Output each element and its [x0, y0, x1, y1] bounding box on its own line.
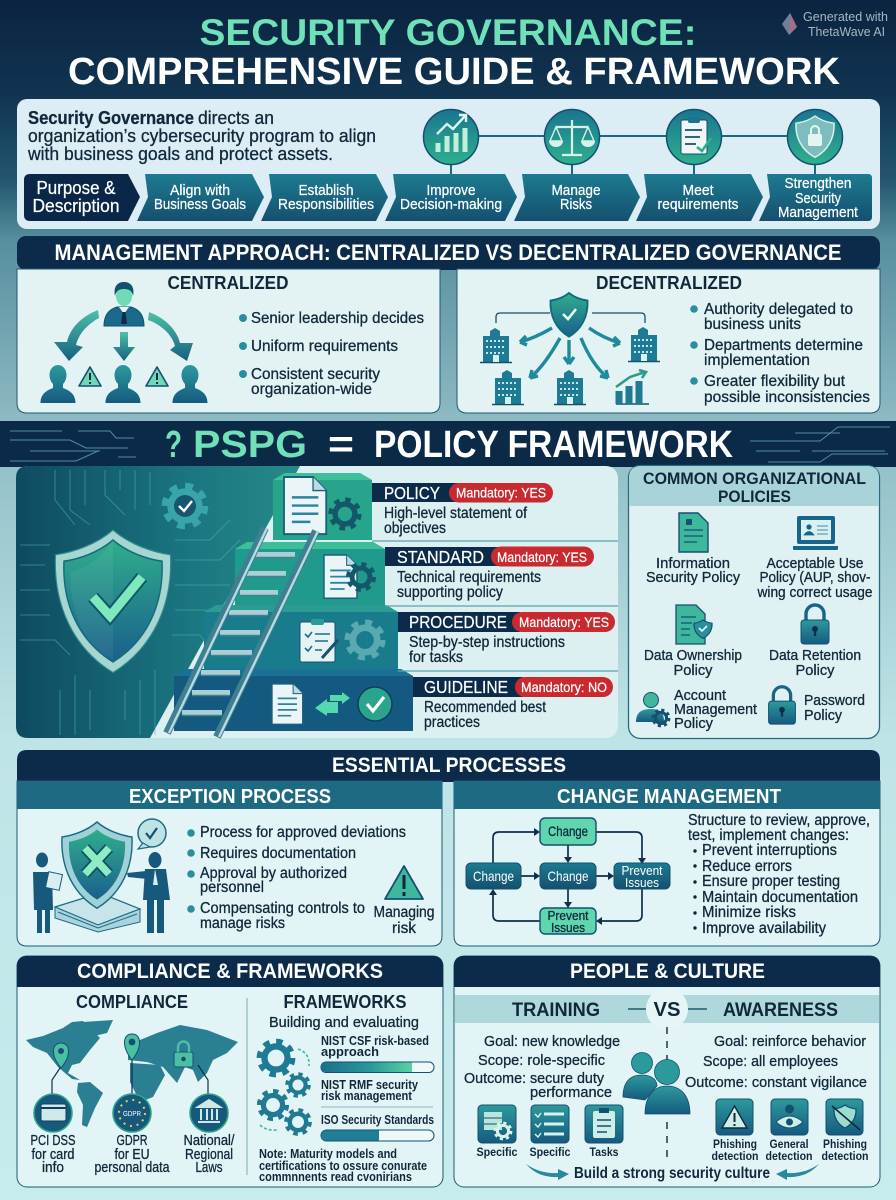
panel: centralized [17, 269, 440, 413]
chevron: meet requirements: requirements [658, 196, 738, 213]
node: left change [466, 863, 521, 889]
world map [26, 1020, 238, 1127]
icon: phishing warning: detection [712, 1149, 758, 1163]
item: information security policy: Security Policy [646, 570, 741, 586]
bullet list: Greater flexibility but [704, 373, 846, 390]
icon: central shield [496, 293, 645, 337]
chevron: strengthen security management: Strengthen [784, 175, 852, 192]
awareness icons [712, 1099, 868, 1163]
item: gdpr [94, 1094, 170, 1176]
label: procedure: PROCEDURE [409, 612, 507, 632]
banner: pspg policy framework: ? [165, 424, 182, 466]
heading [17, 236, 880, 270]
banner: pspg policy framework [0, 421, 896, 467]
bullet list: Departments determine [704, 337, 863, 354]
label: standard: Technical requirements [397, 569, 541, 586]
label: guideline: Recommended best [424, 699, 547, 716]
change text: Prevent interruptions [702, 842, 837, 859]
item: acceptable use policy: Acceptable Use [766, 556, 864, 572]
chevron: strengthen security management: Security [795, 190, 841, 207]
icon: phishing warning [712, 1099, 758, 1163]
item: gdpr: for EU [114, 1147, 150, 1163]
icon: phishing shield [822, 1099, 868, 1163]
panel: change management [454, 781, 880, 946]
item: nist rmf [321, 1078, 433, 1107]
panel: decentralized: DECENTRALIZED [596, 272, 742, 293]
item: information security policy: Information [656, 556, 730, 572]
icon: growth chart [424, 110, 478, 164]
awareness text: Outcome: constant vigilance [685, 1074, 867, 1091]
node: center change [540, 863, 596, 889]
chevron: manage risks: Manage [552, 182, 600, 199]
panel: exception process: EXCEPTION PROCESS [129, 786, 331, 808]
item: data ownership policy: Data Ownership [644, 648, 742, 664]
item: acceptable use policy: wing correct usage [757, 585, 872, 601]
versus band: TRAINING [512, 1000, 600, 1021]
icon: man [127, 852, 170, 933]
heading [17, 750, 880, 782]
panel: purpose and description [17, 99, 880, 229]
intro text: Security Governance [28, 107, 194, 128]
watermark: ThetaWave AI [808, 25, 885, 39]
connector lines [52, 1058, 208, 1095]
chevron: establish responsibilities: Establish [298, 182, 354, 199]
label: standard: Mandatory: YES [497, 549, 587, 565]
chevron: strengthen security management [759, 174, 872, 221]
panel: people and culture [454, 956, 880, 1187]
change text: test, implement changes: [688, 827, 849, 844]
icon: leader [104, 282, 144, 326]
section: essential processes [17, 750, 880, 946]
icon: specific list: Specific [530, 1145, 571, 1159]
chevron: improve decision-making: Improve [426, 182, 476, 199]
label: policy: objectives [384, 520, 446, 537]
node: top change: Change [548, 823, 588, 839]
title: COMPREHENSIVE GUIDE & FRAMEWORK [68, 51, 841, 93]
compliance column [26, 992, 238, 1176]
bullet list: Uniform requirements [251, 338, 398, 355]
tier: policy [273, 473, 372, 540]
bullet list: Approval by authorized [200, 865, 347, 882]
label: guideline [413, 677, 613, 731]
item: pci dss: info [42, 1160, 64, 1176]
arrows: delegation [520, 328, 620, 378]
item: password policy [769, 687, 865, 724]
change text: Ensure proper testing [702, 873, 840, 890]
change text: Improve availability [702, 920, 826, 937]
frameworks column: FRAMEWORKS [284, 992, 406, 1012]
bullet list [690, 301, 870, 406]
node: top change [540, 818, 596, 845]
item: acceptable use policy: Policy (AUP, shov- [760, 570, 871, 586]
panel: people and culture: PEOPLE & CULTURE [570, 960, 765, 983]
icon: phishing shield: detection [822, 1149, 868, 1163]
label: procedure: for tasks [409, 649, 463, 666]
panel: centralized: CENTRALIZED [168, 272, 288, 293]
icon: general eye: General [770, 1137, 808, 1151]
label: policy [372, 483, 553, 537]
ladder [167, 528, 318, 737]
icon: gear check [165, 486, 205, 526]
icon: tasks [585, 1105, 623, 1159]
versus band: AWARENESS [723, 1000, 838, 1021]
title [68, 12, 841, 93]
label: guideline: Mandatory: NO [521, 679, 607, 695]
dark circuit background [16, 466, 300, 738]
note: certifications to ossure conurate [259, 1159, 427, 1173]
icon: general eye: detection [766, 1149, 812, 1163]
label: standard [385, 546, 594, 601]
bullet list: Requires documentation [200, 845, 356, 862]
item: national regional laws: Regional [185, 1147, 233, 1163]
chevron: align with business goals: Align with [170, 182, 230, 199]
note: commnnents read cvonirians [259, 1170, 412, 1184]
chevron: meet requirements [636, 174, 763, 221]
compliance column: COMPLIANCE [76, 992, 188, 1012]
pyramid tiers [174, 473, 413, 731]
icon: scales [544, 110, 600, 164]
heading: COMMON ORGANIZATIONAL [643, 469, 866, 488]
banner: pspg policy framework: POLICY FRAMEWORK [374, 424, 733, 466]
versus band: VS [654, 999, 680, 1021]
chevron: meet requirements: Meet [682, 182, 714, 199]
label: policy: POLICY [384, 483, 440, 503]
chevron: establish responsibilities: Responsibilities [278, 196, 374, 213]
icon: managing risk: risk [392, 920, 416, 937]
change text: Reduce errors [702, 858, 792, 875]
icon: general eye [766, 1099, 812, 1163]
item: gdpr: GDPR [123, 1109, 141, 1118]
label: standard: STANDARD [397, 547, 484, 567]
bullet list [239, 310, 424, 398]
item: national regional laws [184, 1094, 235, 1176]
icon: business units [480, 327, 660, 404]
flow diagram [466, 818, 670, 935]
item: gdpr: GDPR [116, 1133, 148, 1149]
icon: rising chart [616, 370, 649, 404]
item: nist rmf: NIST RMF security [321, 1078, 418, 1092]
panel: exception process [17, 781, 442, 946]
item: national regional laws: Laws [196, 1160, 222, 1176]
item: nist csf: approach [321, 1045, 379, 1059]
training text: Goal: new knowledge [484, 1033, 620, 1050]
heading: MANAGEMENT APPROACH: CENTRALIZED VS DECENTRALIZED GOVERNANCE [54, 240, 842, 265]
chevron: align with business goals [137, 174, 264, 221]
watermark: Generated with [803, 10, 888, 24]
icon: phishing shield: Phishing [823, 1137, 867, 1151]
icon: phishing warning: Phishing [713, 1137, 757, 1151]
panel: policy framework pyramid [16, 466, 618, 738]
frameworks column: Building and evaluating [269, 1014, 419, 1031]
tier: standard [235, 542, 385, 605]
awareness text [685, 1033, 867, 1091]
item: password policy: Password [804, 693, 865, 709]
awareness text: Scope: all employees [703, 1053, 838, 1070]
item: password policy: Policy [804, 708, 843, 724]
heading: ESSENTIAL PROCESSES [332, 754, 566, 777]
item: nist rmf: risk management [321, 1089, 413, 1103]
node: right prevent issues [614, 863, 670, 890]
chevron: purpose and description: Description [32, 196, 120, 216]
connector line [451, 136, 815, 176]
chevron: establish responsibilities [261, 174, 388, 221]
label: procedure: Step-by-step instructions [409, 634, 565, 651]
banner: pspg policy framework: PSPG [193, 424, 307, 466]
bullet list: business units [704, 316, 801, 333]
title: SECURITY GOVERNANCE: [200, 12, 696, 53]
bullet list: organization-wide [251, 381, 372, 398]
node: bottom prevent issues: Issues [551, 920, 585, 935]
chevron: improve decision-making: Decision-making [400, 196, 502, 213]
intro text: directs an [198, 107, 274, 128]
panel: decentralized [457, 269, 880, 413]
icon: main shield [55, 530, 171, 673]
item: national regional laws: National/ [184, 1133, 235, 1149]
bullet list: Process for approved deviations [200, 824, 406, 841]
label: policy: Mandatory: YES [456, 484, 546, 500]
training text: performance [530, 1084, 612, 1101]
item: account management policy: Account [674, 688, 726, 704]
icon: map pins and lock [53, 1034, 193, 1068]
chevron: improve decision-making [385, 174, 517, 221]
panel: change management: CHANGE MANAGEMENT [557, 786, 781, 808]
icon: specific database: Specific [476, 1145, 518, 1159]
change text [688, 812, 870, 937]
node: center change: Change [548, 868, 589, 884]
bullet list: implementation [704, 352, 810, 369]
icon: tasks: Tasks [590, 1145, 619, 1159]
icon: woman [33, 852, 63, 933]
item: data ownership policy [644, 605, 742, 679]
icon: specific list [530, 1105, 571, 1159]
tier: procedure [204, 605, 398, 669]
node: left change: Change [473, 868, 514, 884]
watermark [782, 10, 888, 39]
node: right prevent issues: Issues [625, 875, 659, 890]
label: policy: High-level statement of [384, 505, 528, 522]
item: account management policy [636, 688, 757, 732]
panel: compliance and frameworks: COMPLIANCE & FRAMEWORKS [77, 960, 383, 983]
item: data retention policy: Data Retention [769, 648, 861, 664]
change text: Minimize risks [702, 904, 796, 921]
icon: people [623, 1052, 690, 1114]
panel: compliance and frameworks [17, 956, 443, 1187]
item: pci dss [30, 1094, 76, 1176]
training text: Scope: role-specific [478, 1052, 605, 1069]
awareness text: Goal: reinforce behavior [714, 1033, 866, 1050]
frameworks column [259, 992, 434, 1184]
training icons [476, 1105, 623, 1159]
chevron: manage risks [514, 174, 640, 221]
bullet list: Consistent security [251, 366, 380, 383]
bullet list: possible inconsistencies [704, 389, 870, 406]
item: account management policy: Management [674, 702, 757, 718]
bullet list [187, 824, 406, 932]
item: pci dss: for card [32, 1147, 74, 1163]
item: gdpr: personal data [94, 1160, 170, 1176]
tier: guideline [174, 669, 413, 731]
training text [464, 1033, 620, 1101]
icon: specific database [476, 1105, 518, 1159]
item: nist csf [321, 1034, 434, 1072]
icon: managing risk: Managing [374, 904, 434, 921]
label: standard: supporting policy [397, 584, 503, 601]
bullet list: Compensating controls to [200, 900, 365, 917]
item: iso standards [321, 1113, 434, 1141]
arrows: top-down [54, 310, 193, 361]
label: guideline: practices [424, 714, 480, 731]
chevron: strengthen security management: Management [778, 204, 859, 221]
chevron: manage risks: Risks [560, 196, 592, 213]
versus band [455, 988, 879, 1030]
item: data retention policy [769, 605, 861, 679]
item: nist csf: NIST CSF risk-based [321, 1034, 429, 1048]
panel: common organizational policies: POLICIES [718, 487, 791, 506]
node: right prevent issues: Prevent [622, 863, 663, 878]
bullet list: personnel [200, 879, 264, 896]
banner: pspg policy framework: = [328, 424, 354, 466]
label: procedure: Mandatory: YES [519, 614, 609, 630]
icon: checklist [666, 110, 722, 164]
training text: Outcome: secure duty [464, 1070, 604, 1087]
icon: staff and warnings [40, 365, 208, 403]
bullet list: Authority delegated to [704, 301, 853, 318]
item: account management policy: Policy [674, 716, 714, 732]
panel: common organizational policies [628, 466, 880, 738]
intro text: with business goals and protect assets. [27, 143, 333, 164]
icon: speech bubble [138, 819, 166, 849]
item: acceptable use policy [757, 516, 872, 601]
bullet list: Senior leadership decides [251, 310, 424, 327]
item: data retention policy: Policy [796, 663, 835, 679]
icon: managing risk [374, 866, 434, 937]
illustration: exception shield [33, 819, 170, 933]
divider lines [372, 541, 618, 671]
icon: gears [259, 1041, 310, 1134]
change text: Maintain documentation [702, 889, 858, 906]
section: management approach [17, 236, 880, 413]
note: Note: Maturity models and [259, 1147, 397, 1161]
item: data ownership policy: Policy [674, 663, 713, 679]
bullet list: manage risks [200, 915, 285, 932]
item: iso standards: ISO Security Standards [321, 1113, 434, 1127]
icon: shield lock [788, 110, 842, 164]
chevron: purpose and description [24, 174, 140, 221]
item: pci dss: PCI DSS [30, 1133, 76, 1149]
intro text: organization’s cybersecurity program to align [28, 125, 376, 146]
item: information security policy [646, 513, 741, 586]
chevron: purpose and description: Purpose & [36, 178, 116, 198]
change text: Structure to review, approve, [688, 812, 870, 829]
note [259, 1147, 427, 1184]
node: bottom prevent issues: Prevent [548, 908, 589, 923]
label: procedure [398, 612, 615, 666]
node: bottom prevent issues [540, 908, 596, 935]
label: guideline: GUIDELINE [424, 677, 508, 697]
culture callout: Build a strong security culture [574, 1165, 770, 1182]
chevron: align with business goals: Business Goals [154, 196, 246, 213]
